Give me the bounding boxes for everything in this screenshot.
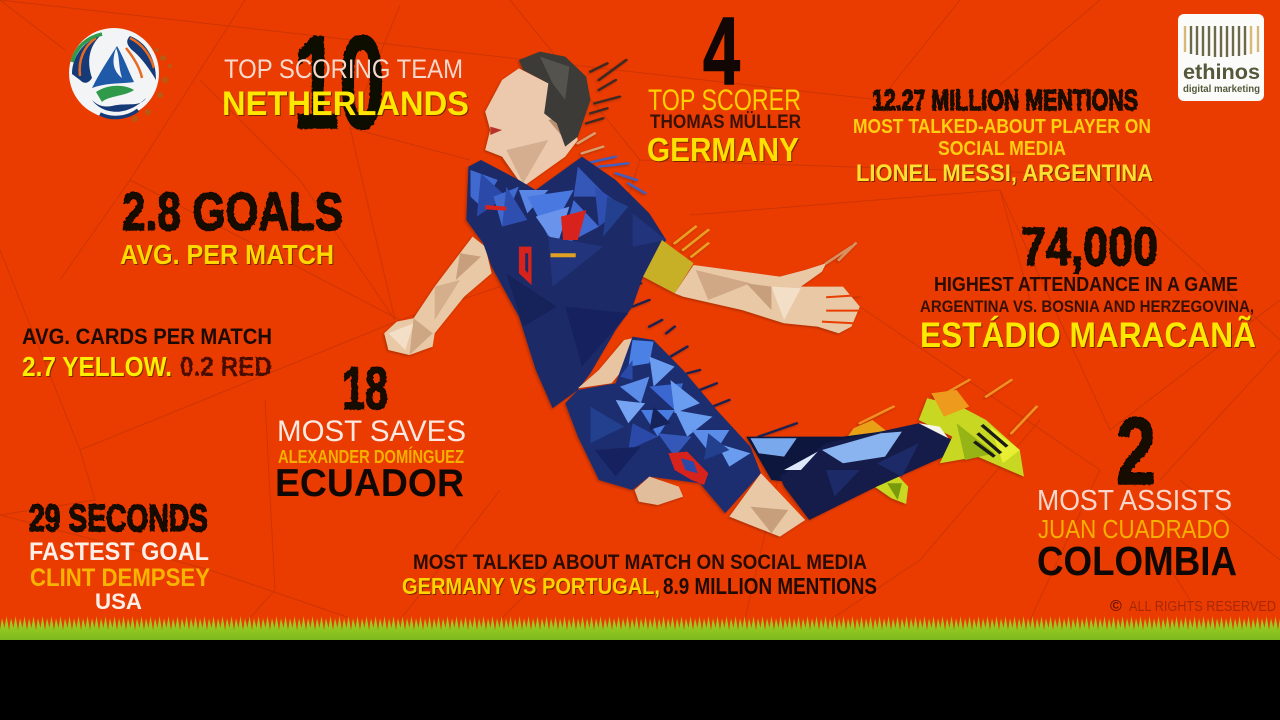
stat: highest attendance: HIGHEST ATTENDANCE IN A GAME: [934, 274, 1238, 296]
stat: average cards: 2.7 YELLOW.: [22, 351, 172, 382]
stat: most saves: [275, 355, 466, 505]
black bottom band: [0, 640, 1280, 720]
stat: fastest goal: [29, 498, 210, 614]
stat: most talked-about player: [853, 85, 1153, 187]
stat: top scorer: GERMANY: [647, 131, 799, 168]
stat: top scorer: [647, 0, 801, 168]
stat: most talked about match: 8.9 MILLION MENTIONS: [663, 573, 877, 599]
stat: top scorer: TOP SCORER: [648, 84, 801, 117]
stat: most saves: MOST SAVES: [277, 415, 466, 448]
stat: most saves: ECUADOR: [275, 462, 464, 505]
logo: ethinos: ethinos: [1183, 61, 1260, 84]
stat: highest attendance: 74,000: [1021, 217, 1158, 277]
speed streaks: [578, 60, 1037, 437]
logo: ethinos: [1178, 14, 1264, 101]
head: [485, 52, 590, 187]
stat: top scoring team: [222, 9, 469, 157]
front leg: [780, 423, 952, 520]
grass strip: [0, 616, 1280, 640]
jersey: [466, 157, 666, 408]
left arm: [384, 237, 492, 355]
stat: most talked about match: GERMANY VS PORTUGAL,: [402, 573, 660, 599]
thigh: [729, 473, 805, 537]
stat: most assists: MOST ASSISTS: [1037, 485, 1232, 517]
stat: most assists: JUAN CUADRADO: [1038, 514, 1230, 544]
stat: top scoring team: NETHERLANDS: [222, 85, 469, 123]
icon: football: [69, 28, 172, 122]
stat: most saves: ALEXANDER DOMÍNGUEZ: [278, 446, 464, 467]
midriff: [578, 338, 633, 388]
stat: most talked-about player: SOCIAL MEDIA: [938, 138, 1066, 160]
stat: most talked about match: MOST TALKED ABOUT MATCH ON SOCIAL MEDIA: [413, 551, 867, 574]
stat: most assists: 2: [1116, 398, 1156, 505]
stat: average cards: 0.2 RED: [180, 351, 272, 382]
stat: most talked-about player: 12.27 MILLION MENTIONS: [872, 85, 1138, 117]
logo: ethinos: digital marketing: [1183, 84, 1260, 95]
right arm: [675, 263, 862, 333]
armband: [643, 240, 694, 293]
stat: top scoring team: 10: [293, 9, 385, 157]
back boot: [843, 420, 908, 504]
player illustration: [384, 52, 1037, 537]
stat: most talked about match: [402, 551, 877, 599]
stat: most talked-about player: LIONEL MESSI, ARGENTINA: [856, 160, 1153, 187]
stat: top scoring team: TOP SCORING TEAM: [224, 54, 463, 84]
stat: average goals: AVG. PER MATCH: [120, 239, 334, 270]
stat: most assists: COLOMBIA: [1037, 538, 1237, 584]
stat: average goals: 2.8 GOALS: [122, 182, 343, 242]
stat: most talked-about player: MOST TALKED-ABOUT PLAYER ON: [853, 116, 1151, 138]
front boot: [919, 390, 1024, 477]
stat: top scorer: THOMAS MÜLLER: [650, 112, 801, 133]
knee: [635, 477, 683, 505]
stat: fastest goal: FASTEST GOAL: [29, 538, 209, 566]
stat: average cards: AVG. CARDS PER MATCH: [22, 324, 272, 349]
copyright: ©: [1110, 598, 1122, 615]
stat: fastest goal: CLINT DEMPSEY: [30, 564, 210, 592]
stat: average cards: [22, 324, 272, 382]
stat: highest attendance: [920, 217, 1256, 355]
shorts: [565, 337, 761, 513]
stat: average goals: [120, 182, 343, 270]
stat: most saves: 18: [342, 355, 388, 422]
stat: most assists: [1037, 398, 1237, 584]
stat: fastest goal: USA: [95, 589, 142, 614]
stat: fastest goal: 29 SECONDS: [29, 498, 208, 540]
back leg: [746, 430, 898, 483]
stat: top scorer: 4: [703, 0, 740, 105]
